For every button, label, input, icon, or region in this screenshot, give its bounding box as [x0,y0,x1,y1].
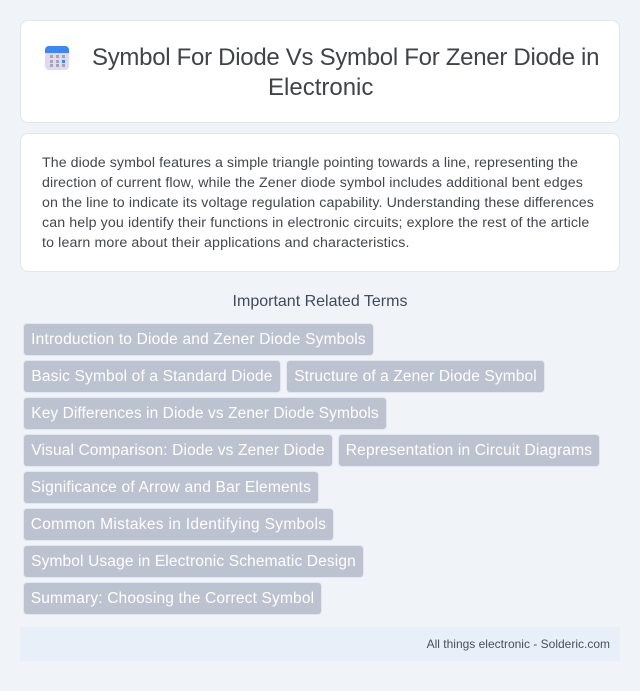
title [92,44,599,101]
tag [24,435,332,466]
tag [287,361,544,392]
tag [24,324,373,355]
tag list [23,323,600,615]
icon: calendar [45,46,69,70]
tag: Symbol Usage in Electronic Schematic Design [31,553,356,570]
intro paragraph: can help you identify their functions in electronic circuits; explore the rest of the article [42,215,589,231]
intro paragraph: The diode symbol features a simple triangle pointing towards a line, representing the [42,155,578,171]
section heading: Important Related Terms [233,293,407,310]
tag: Basic Symbol of a Standard Diode [31,368,273,385]
tag [24,398,386,429]
tag: Visual Comparison: Diode vs Zener Diode [31,442,325,459]
tag: Structure of a Zener Diode Symbol [294,368,537,385]
tag: Summary: Choosing the Correct Symbol [31,590,314,607]
tag [24,546,363,577]
tag: Significance of Arrow and Bar Elements [31,479,311,496]
intro paragraph: direction of current flow, while the Zener diode symbol includes additional bent edges [42,175,583,191]
tag [24,509,333,540]
intro paragraph: on the line to indicate its voltage regulation capability. Understanding these differences [42,195,594,211]
header card [20,20,620,123]
tag [24,361,280,392]
footer text: All things electronic - Solderic.com [427,637,610,651]
title: Symbol For Diode Vs Symbol For Zener Diode in [92,44,599,71]
tag [24,583,321,614]
tag: Common Mistakes in Identifying Symbols [31,516,326,533]
footer bar [20,627,620,661]
intro text panel [20,133,620,272]
tag [339,435,599,466]
tag [24,472,318,503]
tag: Key Differences in Diode vs Zener Diode Symbols [31,405,379,422]
intro paragraph [42,155,594,251]
title: Electronic [268,74,373,101]
intro paragraph: to learn more about their applications and characteristics. [42,235,410,251]
tag: Representation in Circuit Diagrams [346,442,592,459]
tag: Introduction to Diode and Zener Diode Symbols [31,331,366,348]
